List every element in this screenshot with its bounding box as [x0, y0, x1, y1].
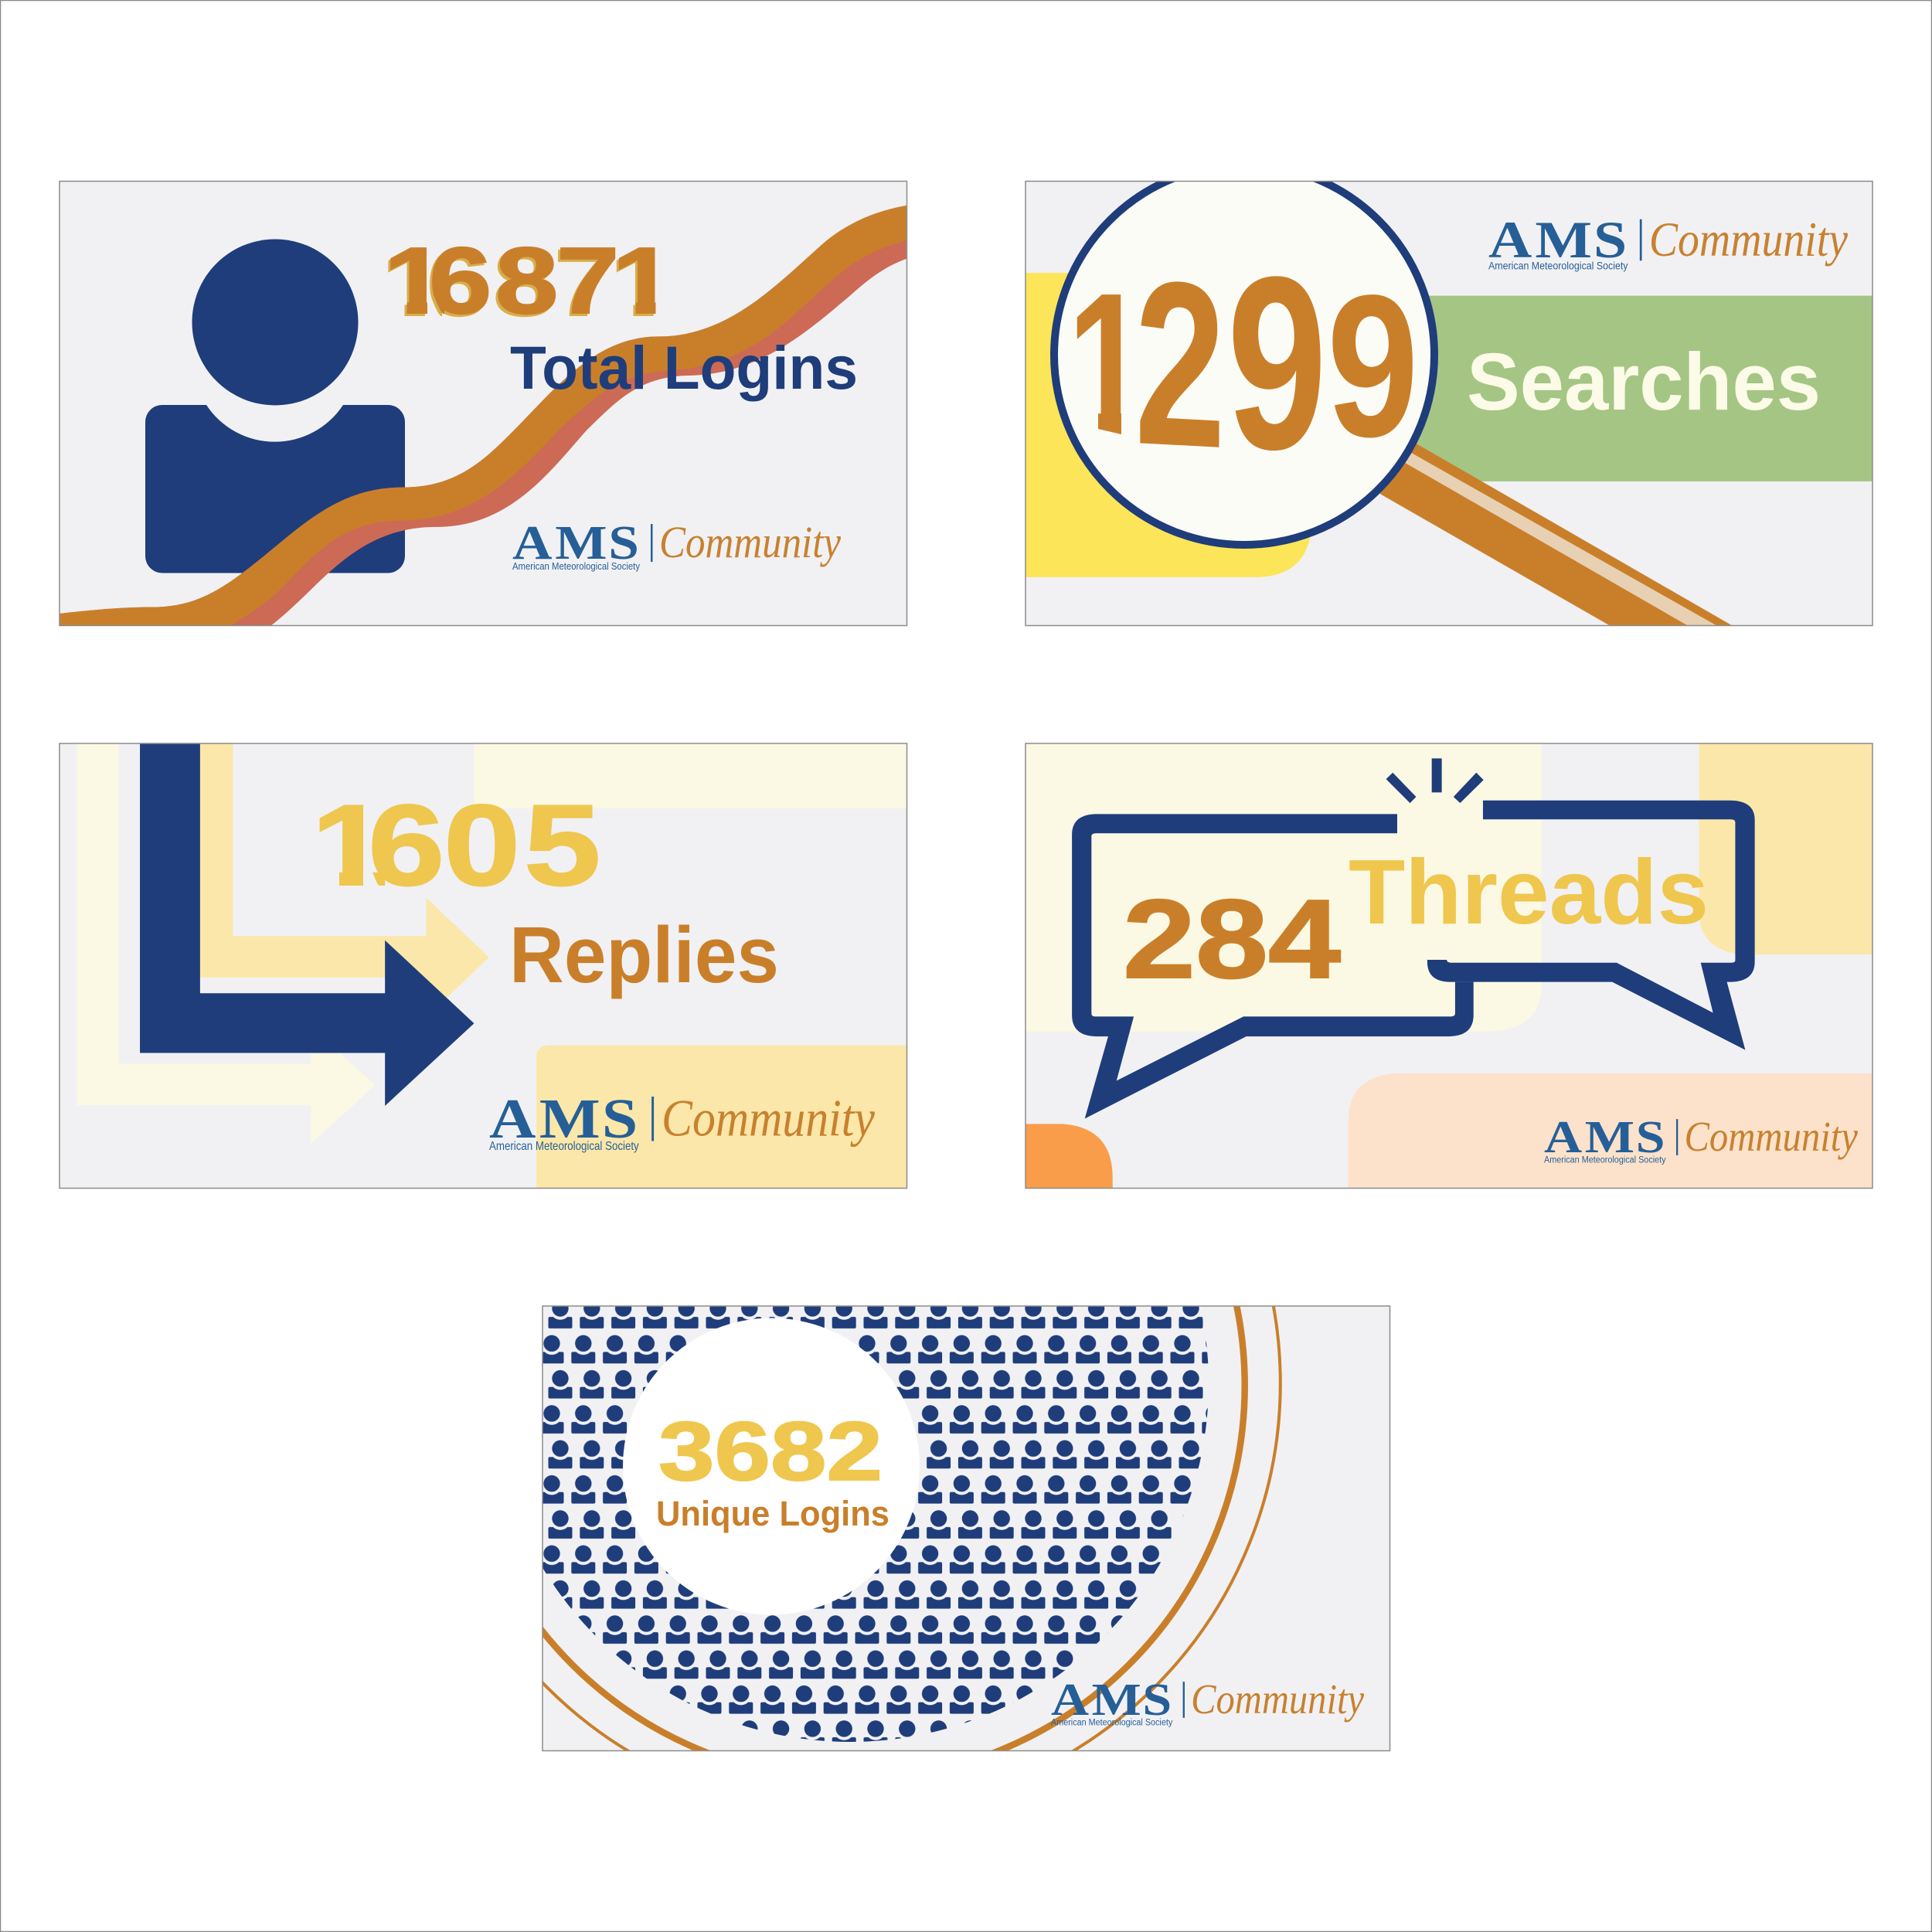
panel: unique logins: [421, 954, 1389, 1813]
yellow block: [1699, 743, 1872, 954]
logo: AMS Community: American Meteorological Society: [489, 1140, 639, 1153]
logo: AMS Community: Community: [659, 517, 841, 567]
logo: AMS Community: Community: [1191, 1675, 1364, 1723]
logo: AMS Community: American Meteorological Society: [1544, 1154, 1666, 1165]
number: 1299: 9: [1227, 226, 1327, 502]
label: Threads: Threads: [1349, 841, 1709, 944]
label: Replies: Replies: [509, 910, 779, 999]
logo: AMS Community: AMS: [1051, 1674, 1172, 1725]
magnifier lens: [1054, 165, 1434, 545]
orange block: [1026, 1124, 1113, 1189]
label: Unique Logins: Unique Logins: [656, 1494, 889, 1533]
logo: AMS Community: Community: [1649, 212, 1849, 267]
label: Searches: Searches: [1467, 337, 1821, 427]
number: 1299: 1: [1067, 252, 1148, 478]
logo: AMS Community: [512, 524, 841, 572]
logo: AMS Community: [1051, 1674, 1364, 1727]
logo: AMS Community: AMS: [512, 516, 639, 570]
logo: AMS Community: [489, 1096, 875, 1153]
peach block: [1349, 1073, 1872, 1189]
number: 1299: [1077, 276, 1413, 451]
logo: AMS Community: American Meteorological Society: [1488, 260, 1628, 272]
logo: AMS Community: [1544, 1111, 1858, 1165]
logo: AMS Community: American Meteorological Society: [1051, 1716, 1173, 1727]
icon: sparks: [1386, 758, 1484, 803]
logo: AMS Community: [1488, 219, 1848, 272]
logo: AMS Community: AMS: [489, 1087, 638, 1150]
number: 1299: 9: [1327, 253, 1419, 479]
arrow: navy: [140, 743, 474, 1106]
arrow: cream: [77, 743, 375, 1144]
panel: replies: [60, 743, 907, 1189]
number: 16871: [388, 246, 655, 317]
speech bubble: left: [1072, 814, 1474, 1118]
magnifier handle: [1380, 444, 1732, 625]
arrow: light yellow: [199, 743, 489, 998]
panel: total logins: [60, 181, 907, 627]
number: 3682: 3682: [658, 1404, 883, 1498]
number: 16871: 16871: [384, 228, 675, 333]
rising ribbon: [60, 206, 906, 627]
number: 284: 284: [1123, 876, 1341, 1002]
ring: thin: [421, 954, 1281, 1813]
number: 16871: 16871: [382, 230, 672, 335]
crowd of people icons: [492, 1025, 1209, 1742]
logo: AMS Community: American Meteorological Society: [512, 560, 640, 572]
icon: person: [145, 240, 405, 573]
label: Total Logins: Total Logins: [510, 333, 858, 402]
logo: AMS Community: AMS: [1544, 1111, 1665, 1162]
logo: AMS Community: Community: [1684, 1113, 1858, 1160]
yellow block: [536, 1046, 906, 1189]
number: 1605: 1605: [311, 781, 600, 910]
yellow block: [1026, 273, 1311, 577]
panel: searches: [1026, 165, 1872, 626]
green band: [1417, 295, 1872, 481]
logo: AMS Community: Community: [662, 1088, 876, 1147]
number: 1299: 2: [1134, 232, 1226, 498]
cream block: [474, 743, 906, 808]
ring: thick: [457, 992, 1245, 1780]
panel: threads: [1026, 743, 1872, 1189]
speech bubble: right: [1427, 801, 1755, 1050]
logo: AMS Community: AMS: [1488, 211, 1627, 269]
cream block: [1026, 743, 1542, 1032]
white circle: [623, 1318, 920, 1615]
